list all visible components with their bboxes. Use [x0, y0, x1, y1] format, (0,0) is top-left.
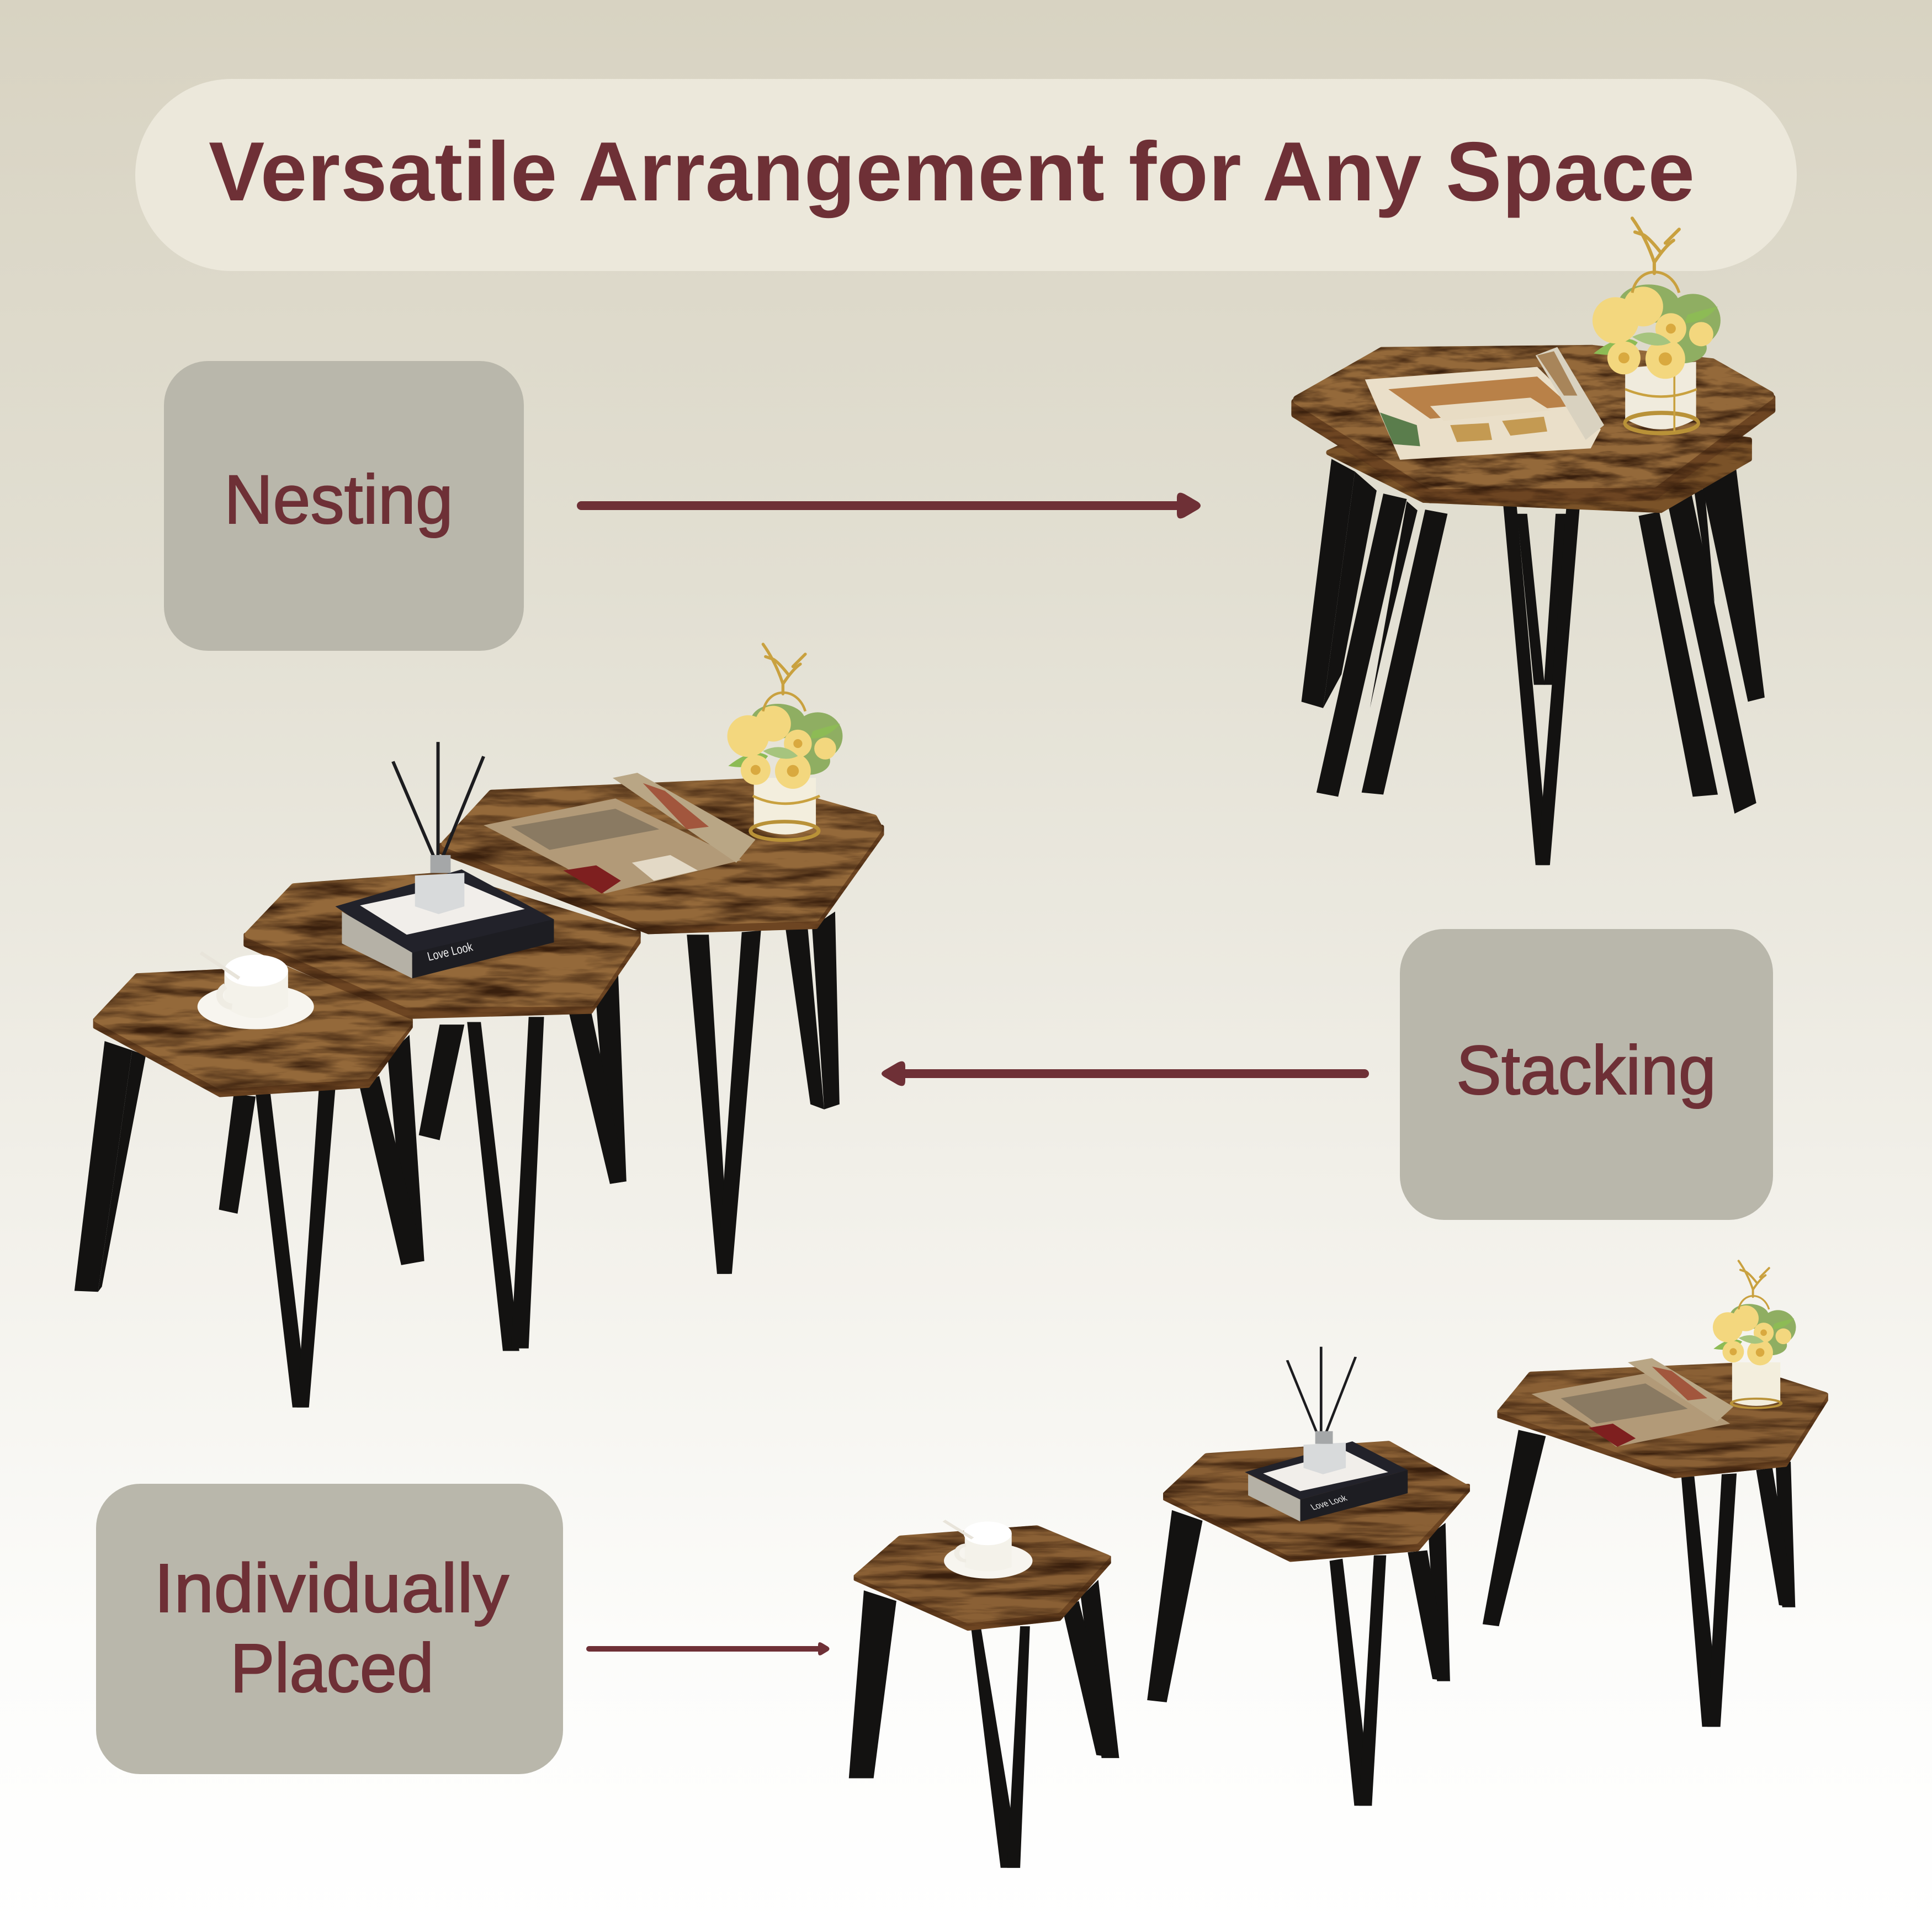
legs — [1147, 1510, 1450, 1806]
magazine — [1365, 347, 1604, 460]
legs — [849, 1580, 1119, 1868]
medium table top — [246, 875, 639, 1017]
arrow: stacking to stacked tables — [882, 1061, 1369, 1086]
upper table top — [1294, 349, 1773, 500]
vase — [751, 778, 820, 840]
label: nesting: Nesting — [224, 461, 453, 538]
cup and saucer — [944, 1521, 1033, 1579]
book: Love Look — [1309, 1494, 1349, 1512]
vase — [1732, 1362, 1781, 1408]
label: stacking: Stacking — [1456, 1032, 1716, 1109]
arrow: nesting to nested tables — [577, 493, 1201, 518]
diffuser — [393, 742, 484, 914]
table top — [1165, 1443, 1468, 1561]
arrow: individually placed to separate tables — [586, 1642, 829, 1655]
vase — [1625, 351, 1699, 433]
individual tables — [849, 1261, 1827, 1868]
book: Love Look — [426, 940, 474, 963]
book — [335, 869, 554, 978]
title banner — [135, 79, 1797, 271]
legs: large table — [687, 911, 840, 1274]
magazine — [484, 773, 756, 894]
legs: medium table — [419, 973, 627, 1351]
nested tables — [1294, 218, 1773, 865]
label: individually placed — [96, 1484, 563, 1774]
flowers — [728, 644, 842, 789]
small table top — [95, 969, 411, 1096]
magazine — [1531, 1358, 1733, 1447]
diffuser — [1287, 1347, 1356, 1474]
table top — [1499, 1365, 1827, 1477]
label: nesting — [164, 361, 524, 651]
stacked tables — [75, 644, 882, 1408]
label: individually placed: Placed — [230, 1630, 434, 1707]
title: Versatile Arrangement for Any Space — [209, 125, 1695, 219]
cup and saucer — [198, 953, 314, 1029]
legs — [1483, 1430, 1795, 1727]
table top — [856, 1527, 1110, 1630]
flowers — [1593, 218, 1721, 379]
large table — [1483, 1261, 1827, 1727]
book — [1245, 1441, 1408, 1521]
label: individually placed: Individually — [154, 1550, 509, 1627]
medium table — [1147, 1347, 1468, 1806]
flowers — [1713, 1261, 1796, 1365]
lower table top — [1328, 433, 1750, 511]
legs — [1302, 459, 1765, 865]
large table top — [441, 782, 882, 932]
label: stacking — [1400, 929, 1773, 1220]
legs: small table — [75, 1035, 424, 1408]
small table — [849, 1521, 1119, 1868]
